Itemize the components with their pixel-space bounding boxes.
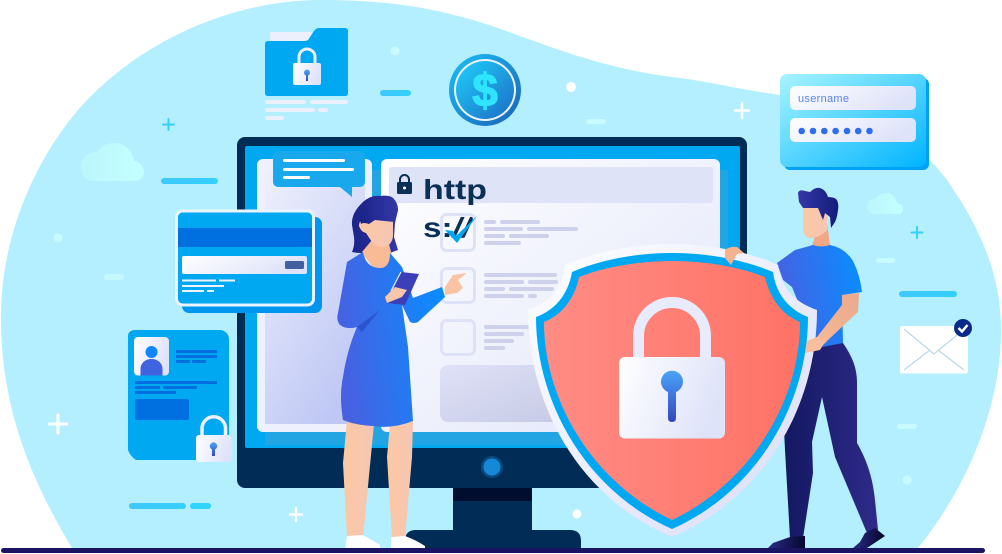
shield <box>528 244 817 537</box>
woman shoes <box>345 535 425 548</box>
url text: http <box>423 174 487 205</box>
icon: cloud left <box>81 143 144 181</box>
checkbox 3 <box>442 320 474 354</box>
profile photo <box>134 337 169 376</box>
url text: s:// <box>423 212 475 243</box>
man shoes <box>768 528 885 548</box>
username field <box>790 86 916 110</box>
dollar coin: $ <box>472 64 498 116</box>
right page panel <box>381 159 720 432</box>
username field: username <box>798 93 849 105</box>
man neck <box>812 222 830 248</box>
envelope <box>900 319 972 374</box>
monitor power button <box>481 456 503 478</box>
man <box>768 188 885 548</box>
woman <box>337 196 467 548</box>
woman back hair <box>352 196 398 253</box>
icon: small padlock <box>196 417 232 462</box>
monitor stand <box>405 485 581 550</box>
checkbox 2 <box>442 268 474 302</box>
man pants <box>780 343 878 538</box>
text lines 3 <box>484 325 544 350</box>
login card <box>780 74 929 170</box>
checkbox 1 <box>442 214 477 250</box>
man hand on shield <box>725 247 744 265</box>
address bar <box>389 167 713 203</box>
icon: check badge <box>954 319 972 337</box>
id card <box>128 330 232 462</box>
monitor screen <box>245 146 740 448</box>
ground line <box>1 548 985 553</box>
woman phone <box>387 272 419 305</box>
woman neck <box>362 240 392 270</box>
text lines 1 <box>484 220 578 245</box>
icon: folder padlock <box>293 49 321 85</box>
woman fringe <box>359 196 398 224</box>
checkbox list <box>440 214 578 422</box>
man shirt <box>777 245 862 348</box>
man hand lower <box>805 337 826 353</box>
woman legs <box>343 420 413 538</box>
submit button <box>440 365 570 422</box>
credit card <box>176 211 322 313</box>
man head <box>803 204 827 238</box>
dashes and dots <box>54 46 957 518</box>
man hair <box>798 188 838 228</box>
woman arm shadow <box>357 310 380 332</box>
url text <box>423 174 487 243</box>
plus signs <box>50 103 922 521</box>
icon: large padlock <box>619 302 725 438</box>
left page panel <box>257 159 372 432</box>
folder icon <box>265 28 348 120</box>
password field <box>790 118 916 142</box>
background decorations <box>50 46 957 521</box>
dollar coin <box>449 54 521 126</box>
chat bubble <box>273 151 365 197</box>
woman hand holding phone <box>385 287 407 303</box>
monitor frame <box>237 137 747 488</box>
woman pointing hand <box>445 273 467 295</box>
man arm <box>805 293 859 353</box>
monitor <box>237 137 747 550</box>
icon: cloud right <box>867 193 903 214</box>
icon: address bar lock <box>397 175 412 194</box>
woman face <box>359 219 393 247</box>
woman dress <box>337 252 445 427</box>
text lines 2 <box>484 273 558 298</box>
